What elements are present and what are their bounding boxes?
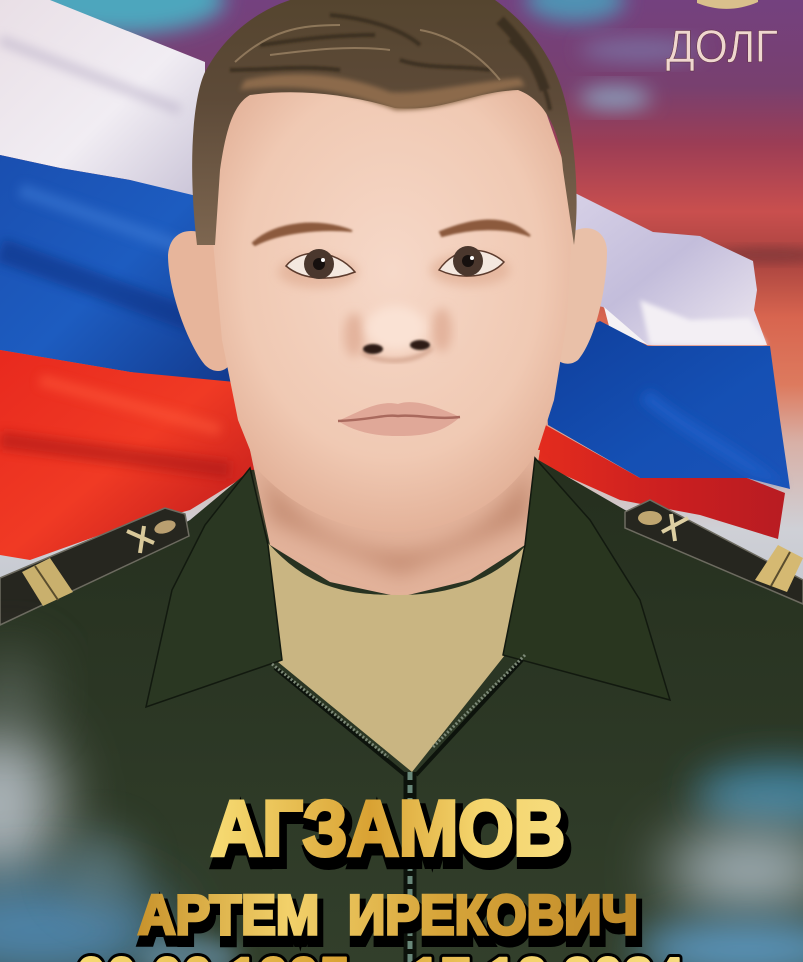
title: surname: АГЗАМОВ xyxy=(211,784,565,872)
eyebrow right xyxy=(440,220,530,236)
neck xyxy=(250,450,540,597)
face xyxy=(212,82,572,532)
ear: left xyxy=(168,231,232,371)
logo wordmark: ДОЛГ xyxy=(666,21,778,72)
eye right xyxy=(439,246,504,276)
rank stripes left xyxy=(22,558,73,606)
eye left xyxy=(286,249,355,279)
heading: given name and patronymic: АРТЕМ ИРЕКОВИЧ xyxy=(138,883,638,946)
logo: ДОЛГ with ornament xyxy=(666,0,778,72)
flag red stripe right xyxy=(535,422,785,539)
eye shadow xyxy=(278,254,510,288)
ear: right xyxy=(552,228,607,364)
flag white stripe right xyxy=(560,185,767,345)
collar: right xyxy=(503,458,670,700)
epaulette: right xyxy=(625,500,803,604)
undershirt xyxy=(268,543,526,772)
fog: clouds over the uniform xyxy=(0,655,803,962)
flag blue stripe right xyxy=(545,321,790,489)
flag blue stripe left xyxy=(0,155,235,388)
hair xyxy=(192,0,577,245)
rank emblem left xyxy=(127,526,154,553)
heading: given name and patronymic: АРТЕМ ИРЕКОВИЧ xyxy=(141,891,641,954)
title: surname: АГЗАМОВ xyxy=(215,792,569,880)
nose xyxy=(344,306,452,361)
collar: left xyxy=(146,468,282,707)
flag: left side xyxy=(0,0,255,560)
flag white stripe left xyxy=(0,0,205,200)
flag red stripe left xyxy=(0,350,255,560)
rank emblem right xyxy=(662,514,688,541)
mouth xyxy=(338,402,460,436)
tunic body xyxy=(0,458,803,962)
logo ornament xyxy=(697,0,758,9)
jaw shadow xyxy=(262,465,530,575)
eyebrow left xyxy=(253,224,352,245)
rank stripes right xyxy=(755,545,803,592)
flag: right side xyxy=(535,185,790,539)
epaulette: left xyxy=(0,508,189,625)
zipper xyxy=(272,655,525,962)
